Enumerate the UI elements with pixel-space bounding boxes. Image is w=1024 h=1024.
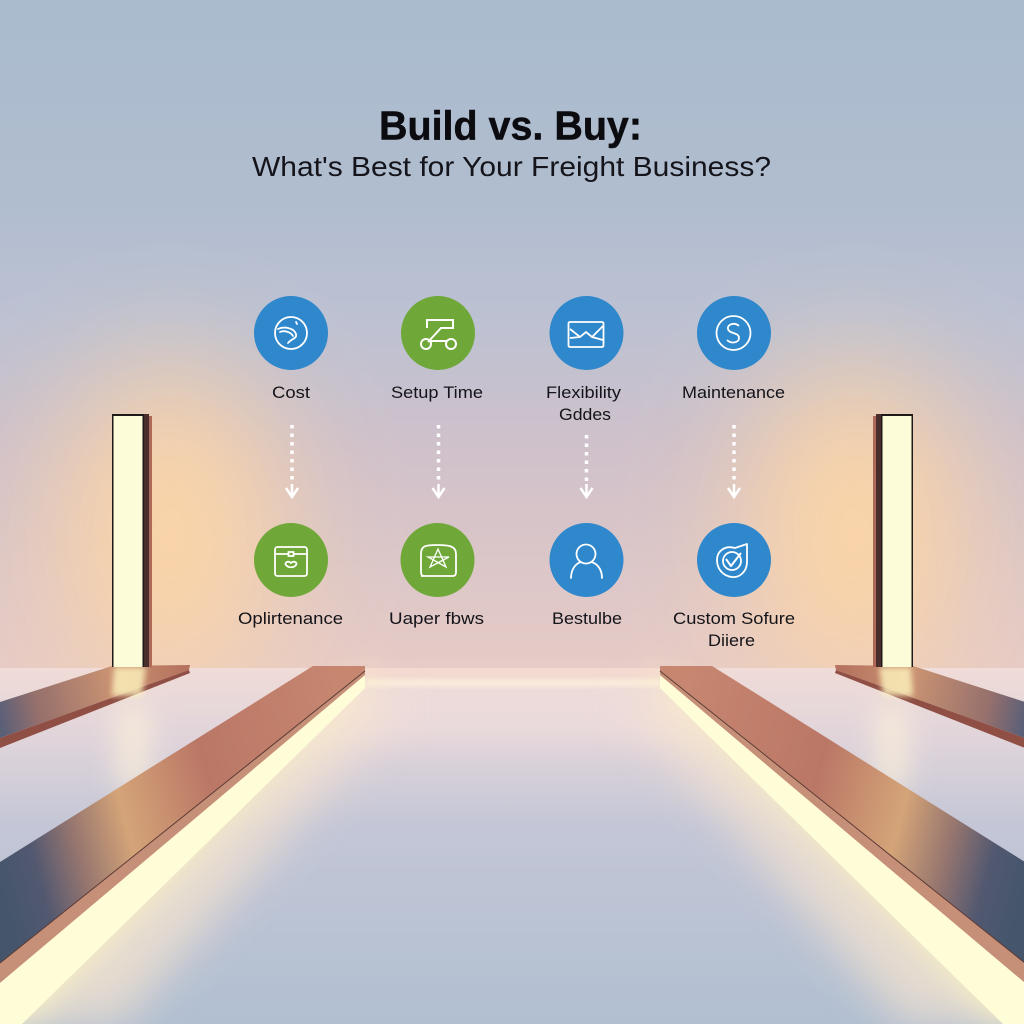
label: maintenance: Maintenance bbox=[682, 383, 785, 402]
item: custom software bbox=[673, 523, 795, 650]
label: custom software line 2: Diiere bbox=[708, 631, 755, 650]
left light strip bbox=[0, 666, 365, 1024]
label: setup time: Setup Time bbox=[391, 383, 483, 402]
icon: cost dial bbox=[275, 317, 307, 349]
arrow 2 bbox=[432, 425, 444, 497]
item: setup time bbox=[391, 296, 483, 402]
label: optimization: Oplirtenance bbox=[238, 609, 343, 628]
left light pillar bbox=[0, 414, 190, 748]
icon: dollar coin bbox=[716, 316, 750, 350]
arrow 3 bbox=[580, 435, 592, 497]
icon: person bbox=[571, 544, 602, 578]
label: custom software line 1: Custom Sofure bbox=[673, 609, 795, 628]
label: flexibility: Flexibility bbox=[546, 383, 622, 402]
icon: setup route bbox=[421, 320, 456, 349]
icon: box bbox=[275, 547, 307, 576]
icon: star badge bbox=[421, 545, 456, 576]
arrow 1 bbox=[286, 425, 298, 497]
label: guides: Gddes bbox=[559, 405, 611, 424]
item: flexibility bbox=[546, 296, 624, 424]
item: maintenance bbox=[682, 296, 785, 402]
item: upper flows bbox=[389, 523, 484, 628]
label: cost: Cost bbox=[272, 383, 310, 402]
icon: target check bbox=[717, 544, 747, 577]
right light pillar bbox=[835, 414, 1024, 748]
subtitle: What's Best for Your Freight Business? bbox=[252, 151, 771, 182]
arrow 4 bbox=[728, 425, 740, 497]
label: upper flows: Uaper fbws bbox=[389, 609, 484, 628]
icon: envelope bbox=[568, 322, 604, 347]
item: best value bbox=[550, 523, 624, 628]
label: best value: Bestulbe bbox=[552, 609, 622, 628]
title: Build vs. Buy: bbox=[379, 102, 642, 148]
back wall bbox=[0, 0, 1024, 695]
floor bbox=[0, 668, 1024, 1024]
right light strip bbox=[660, 666, 1024, 1024]
item: optimization bbox=[238, 523, 343, 628]
item: cost bbox=[254, 296, 328, 402]
